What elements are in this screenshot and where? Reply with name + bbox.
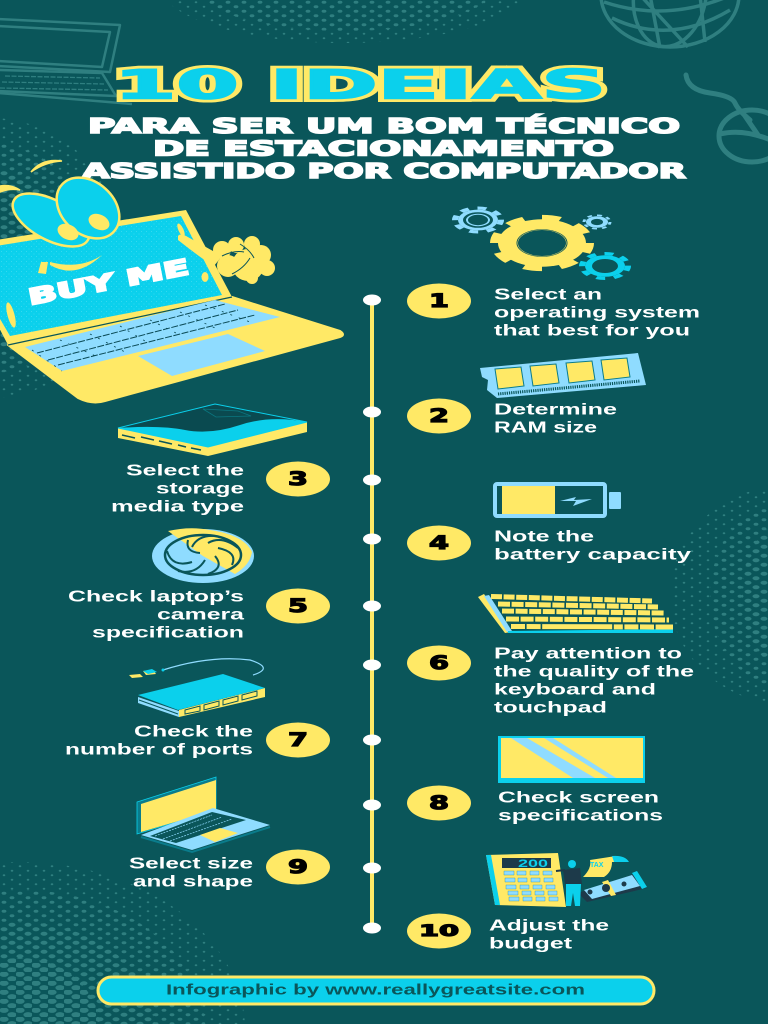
blue gear <box>455 208 501 232</box>
step 1: that best for you <box>494 323 690 340</box>
illustration: battery <box>495 484 621 516</box>
subtitle: DE ESTACIONAMENTO <box>153 136 614 160</box>
step 7: number of ports <box>65 742 253 759</box>
step 8: 8 <box>429 792 449 814</box>
step 4: 4 <box>429 532 449 554</box>
illustration: large laptop <box>0 160 343 402</box>
step 10: 10 <box>419 921 459 940</box>
step 5: Check laptop’s <box>68 589 244 606</box>
hinge line <box>8 297 232 345</box>
step 1: operating system <box>494 305 700 322</box>
step 2: RAM size <box>494 420 598 437</box>
illustration: budget calculator: TAX <box>590 862 604 869</box>
big yellow gear <box>495 218 589 268</box>
title <box>114 62 606 108</box>
step 9: Select size <box>129 856 254 873</box>
step 9: 9 <box>288 856 308 878</box>
step 9 <box>129 850 330 891</box>
footer credit <box>98 977 654 1004</box>
illustration: gears <box>455 208 628 278</box>
step 10 <box>407 914 610 953</box>
halftone: left <box>0 118 125 398</box>
step 3: 3 <box>288 468 308 490</box>
step 1 <box>407 284 700 340</box>
small blue gear <box>584 215 610 229</box>
illustration: camera aperture <box>152 528 254 583</box>
step 8: Check screen <box>498 790 659 807</box>
step 2: Determine <box>494 402 618 419</box>
step 9: and shape <box>133 874 254 891</box>
timeline <box>363 294 381 934</box>
background icon: globe <box>601 0 739 52</box>
step 5: specification <box>92 625 244 642</box>
subtitle: ASSISTIDO POR COMPUTADOR <box>82 159 686 183</box>
step 8 <box>407 786 663 825</box>
laptop base <box>8 297 343 402</box>
step 6: keyboard and <box>494 682 656 699</box>
title: 10 IDEIAS <box>114 62 606 108</box>
eyes and smile <box>0 160 208 328</box>
step 5: camera <box>157 607 245 624</box>
keyboard <box>25 300 280 371</box>
screen text: BUY ME <box>26 255 191 311</box>
step 6: 6 <box>429 652 449 674</box>
trackpad <box>138 334 265 376</box>
halftone: top <box>160 0 530 43</box>
step 7 <box>65 722 330 759</box>
illustration: keyboard <box>478 594 673 633</box>
pointing hand <box>178 234 275 284</box>
illustration: screen <box>498 736 645 783</box>
laptop screen <box>0 210 232 345</box>
background icon: mouse and cable <box>686 75 768 162</box>
step 2: 2 <box>429 405 449 427</box>
subtitle <box>82 113 686 183</box>
step 4 <box>407 526 692 564</box>
step 2 <box>407 398 618 437</box>
subtitle: PARA SER UM BOM TÉCNICO <box>88 113 680 138</box>
title: 10 IDEIAS <box>114 62 606 108</box>
step 5 <box>68 588 330 642</box>
step 7: 7 <box>288 729 308 751</box>
illustration: RAM module <box>480 353 646 398</box>
halftone: right <box>670 485 768 705</box>
illustration: budget calculator: 200 <box>518 858 548 870</box>
step 3: media type <box>111 499 245 516</box>
step 5: 5 <box>288 595 308 617</box>
step 10: Adjust the <box>489 918 610 935</box>
step 6: touchpad <box>494 700 607 717</box>
illustration: port hub <box>129 659 265 717</box>
step 8: specifications <box>498 808 663 825</box>
step 3: Select the <box>126 463 245 480</box>
step 10: budget <box>489 936 572 953</box>
step 1: 1 <box>429 290 449 312</box>
step 4: Note the <box>494 529 595 546</box>
background icon: laptop outline <box>0 19 132 104</box>
step 3: storage <box>156 481 245 498</box>
step 4: battery capacity <box>494 547 692 564</box>
step 6 <box>407 646 695 717</box>
step 7: Check the <box>134 724 254 741</box>
step 6: the quality of the <box>494 664 695 681</box>
step 6: Pay attention to <box>494 646 682 663</box>
step 1: Select an <box>494 287 602 304</box>
halftone: bottom left <box>0 862 245 1024</box>
illustration: budget calculator <box>486 853 647 907</box>
cyan gear <box>582 254 628 278</box>
step 3 <box>111 462 330 516</box>
footer credit: Infographic by www.reallygreatsite.com <box>166 982 585 998</box>
illustration: storage drive <box>118 404 307 456</box>
illustration: small laptop <box>137 777 270 852</box>
